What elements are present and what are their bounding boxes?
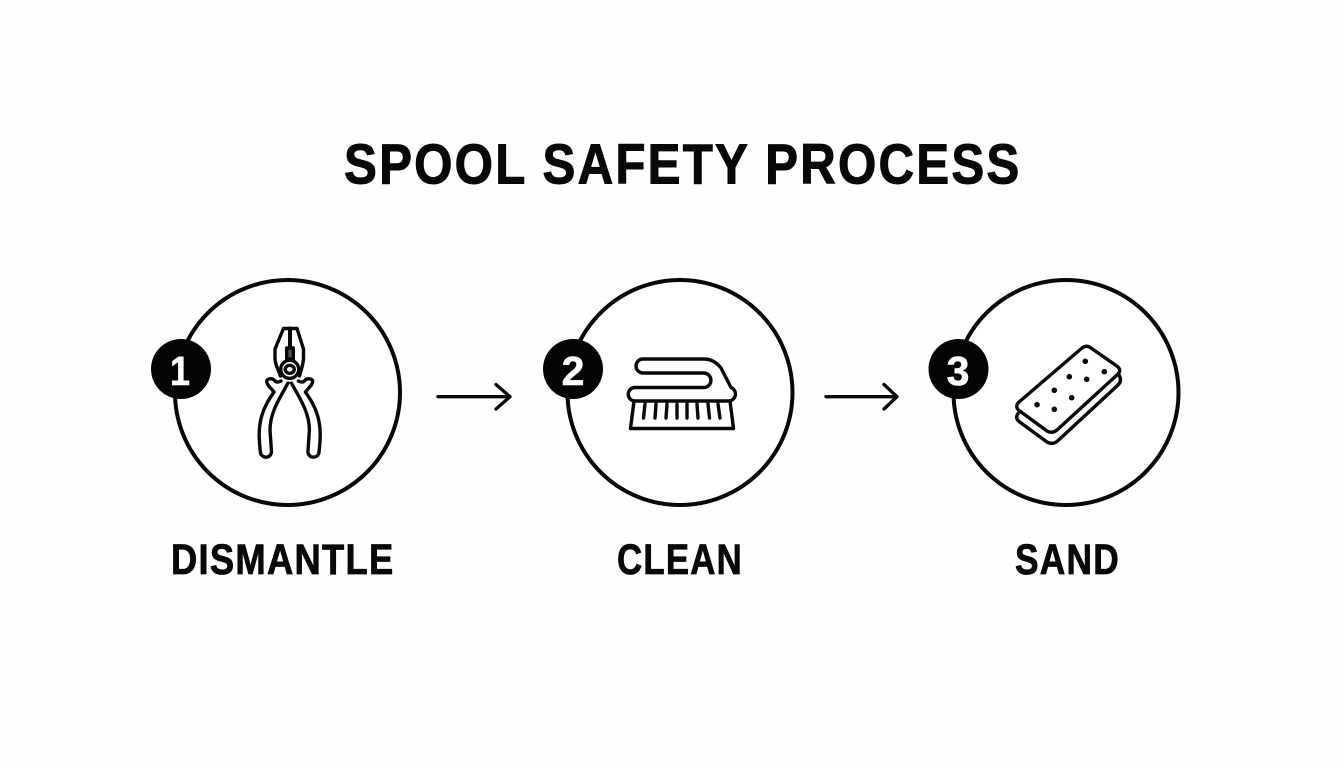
step 1: dismantle — [151, 280, 400, 584]
icon: sanding block — [1017, 346, 1120, 443]
number badge 2 — [543, 339, 603, 399]
arrow 1 to 2 — [438, 384, 510, 409]
arrow 2 to 3 — [826, 384, 897, 409]
number badge 1 — [151, 339, 211, 399]
number badge 2: 2 — [562, 348, 584, 394]
step 1 circle — [175, 280, 400, 505]
icon: scrub brush — [628, 359, 735, 428]
label: clean: CLEAN — [617, 537, 743, 584]
label: sand: SAND — [1015, 537, 1120, 584]
number badge 3: 3 — [947, 348, 969, 394]
title: SPOOL SAFETY PROCESS — [344, 132, 1022, 196]
number badge 3 — [928, 339, 988, 399]
step 3: sand — [928, 280, 1178, 584]
number badge 1: 1 — [170, 348, 190, 394]
label: dismantle: DISMANTLE — [171, 537, 394, 584]
icon: pliers — [259, 328, 320, 457]
step 3 circle — [954, 280, 1178, 505]
step 2 circle — [568, 280, 792, 505]
step 2: clean — [543, 280, 792, 584]
